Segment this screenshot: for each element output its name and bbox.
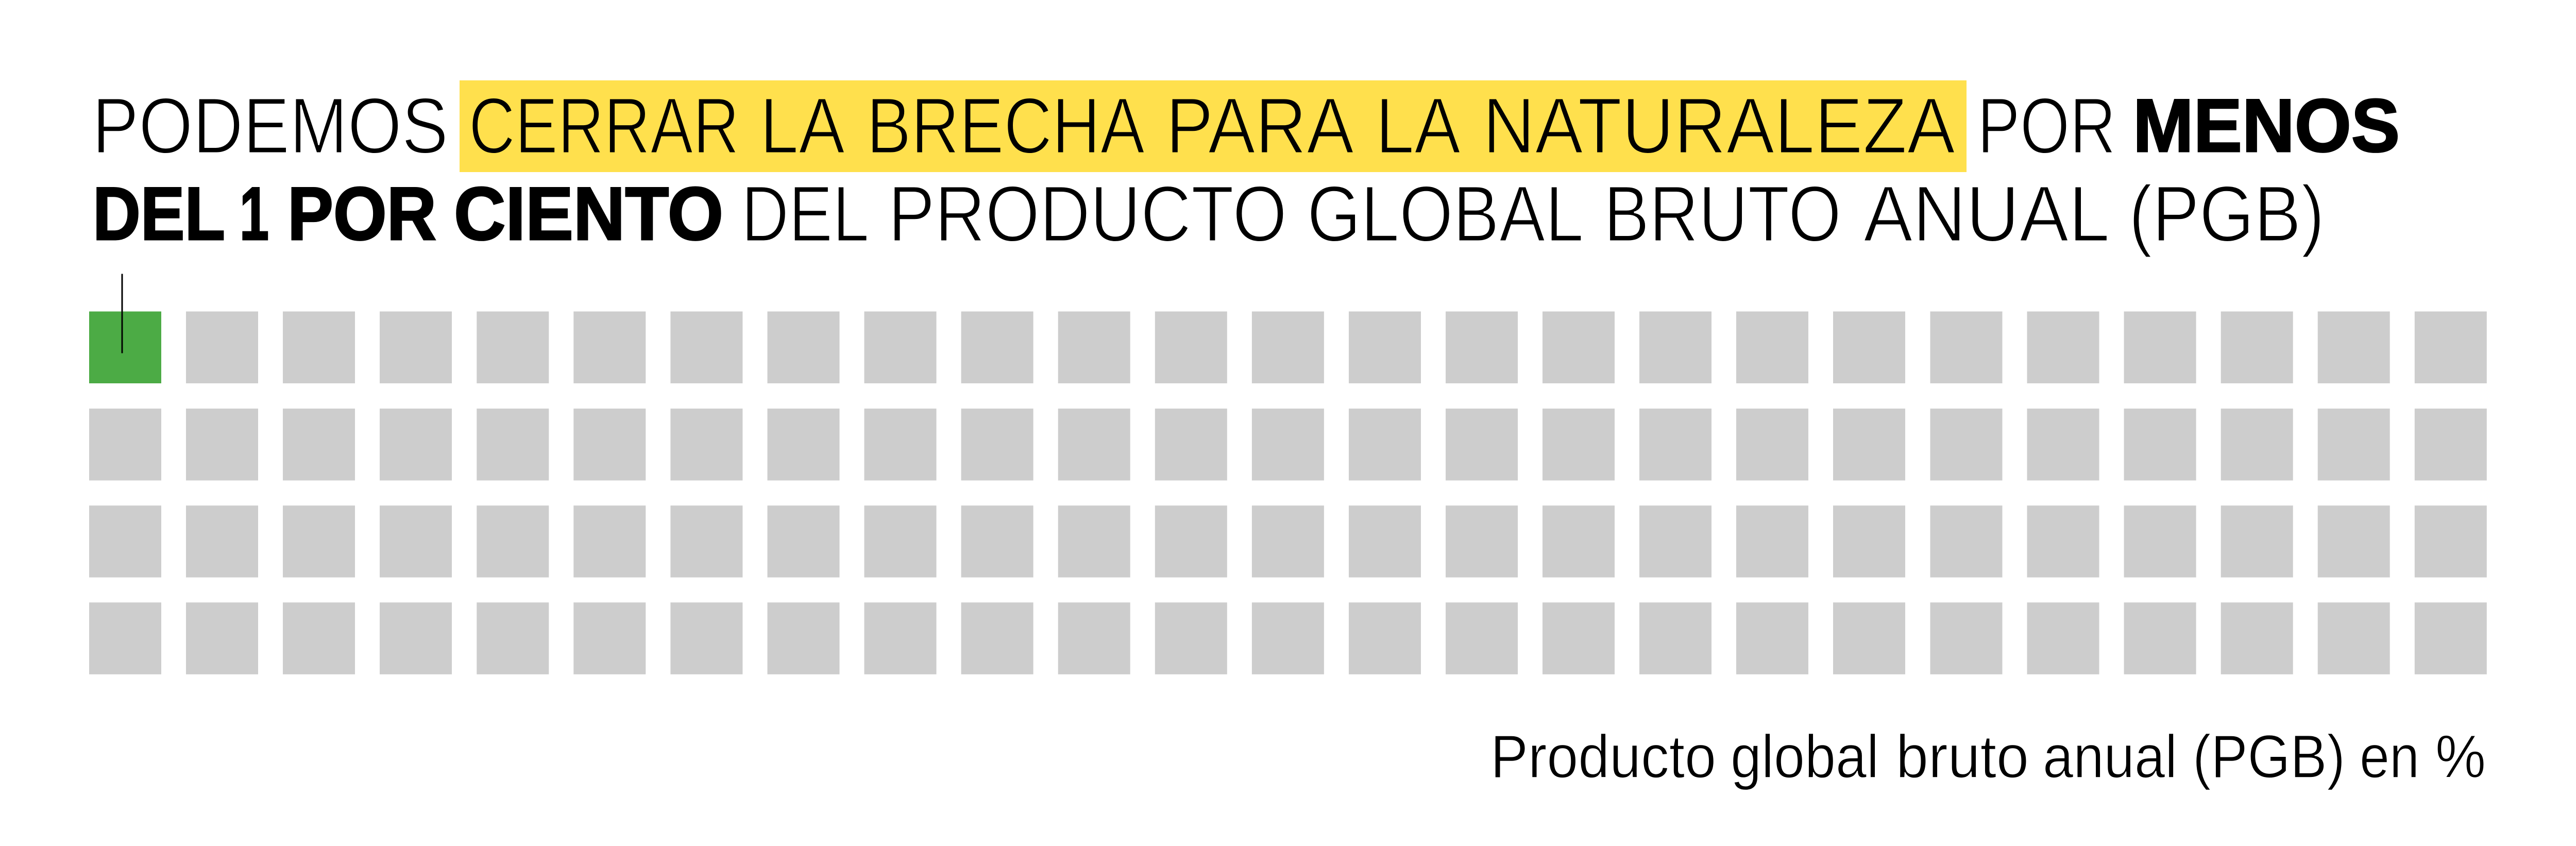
row 4 grey squares [89, 602, 2487, 674]
title line 2: CIENTO [454, 172, 723, 256]
axis caption: (PGB) [2193, 723, 2345, 791]
title line 1: MENOS [2133, 83, 2400, 167]
title line 2: DEL [93, 172, 225, 256]
title line 2: BRUTO [1604, 170, 1841, 258]
axis caption [1490, 723, 2486, 791]
title line 2: ANUAL [1863, 170, 2110, 258]
title line 2: PRODUCTO [888, 170, 1287, 258]
title line 1 [92, 81, 2400, 170]
title line 1: LA [1376, 81, 1461, 170]
title line 2: 1 [240, 172, 269, 256]
title line 2: POR [287, 172, 436, 256]
axis caption: Producto [1490, 723, 1716, 791]
title [92, 80, 2400, 258]
waffle chart: 100 squares, one green [89, 311, 2487, 674]
axis caption: bruto [1896, 723, 2029, 791]
row 3 grey squares [89, 505, 2487, 578]
title highlight [460, 80, 1967, 172]
title line 1: NATURALEZA [1483, 81, 1955, 170]
title line 1: LA [760, 81, 845, 170]
highlighted square: 1 percent [89, 311, 161, 383]
title line 1: PODEMOS [92, 81, 448, 170]
title line 2: (PGB) [2129, 170, 2325, 258]
row 2 grey squares [89, 409, 2487, 480]
title line 2: DEL [741, 170, 869, 258]
axis caption: en [2360, 723, 2419, 791]
row 1 grey squares [186, 311, 2487, 383]
title line 1: BRECHA [867, 81, 1145, 170]
marker line on green square [122, 274, 123, 353]
title line 1: CERRAR [469, 81, 739, 170]
title line 1: PARA [1166, 81, 1354, 170]
title line 1: POR [1977, 81, 2116, 170]
axis caption: % [2435, 723, 2486, 791]
axis caption: anual [2043, 723, 2177, 791]
axis caption: global [1731, 723, 1879, 791]
title line 2: GLOBAL [1307, 170, 1584, 258]
title line 2 [93, 170, 2325, 258]
